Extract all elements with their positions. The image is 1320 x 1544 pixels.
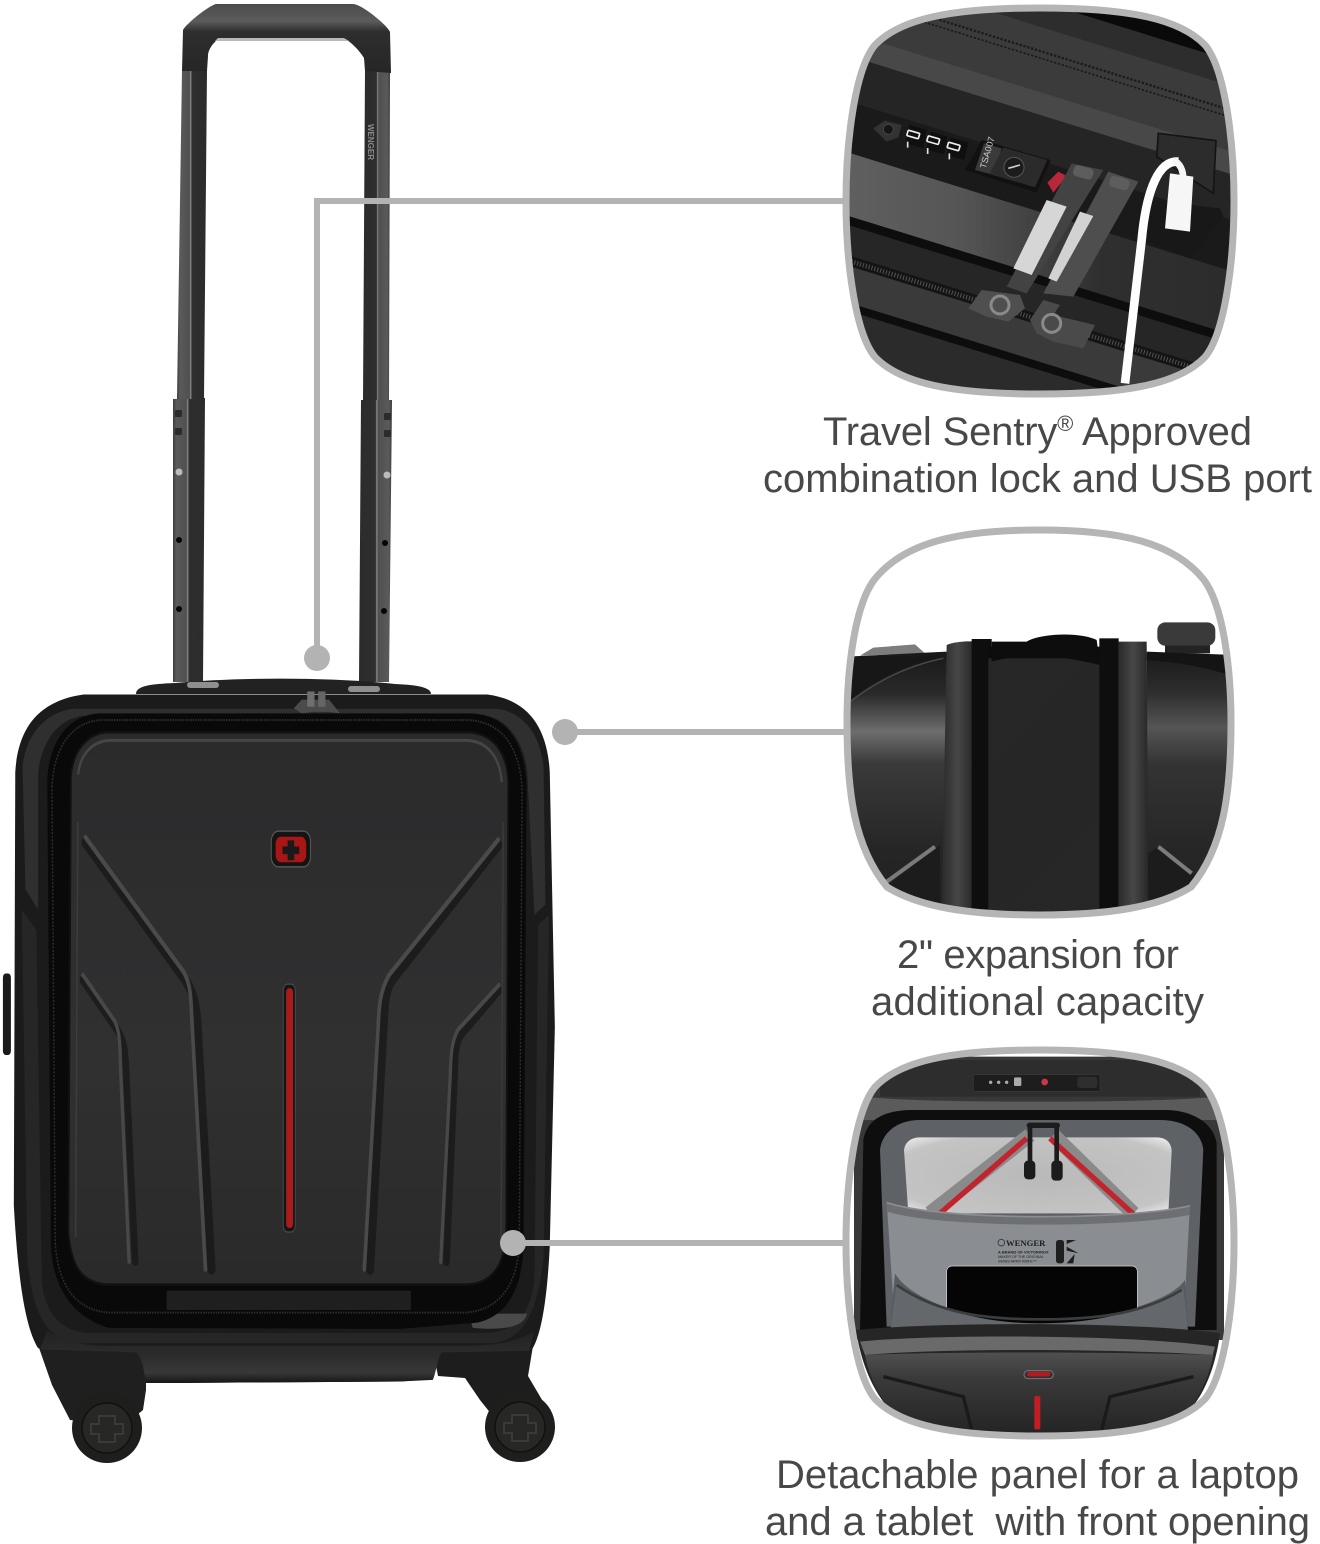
right shell bbox=[1146, 654, 1228, 878]
red stripe bbox=[283, 984, 295, 1232]
caption: expansion: additional capacity bbox=[871, 980, 1204, 1024]
grip bbox=[182, 4, 391, 73]
callout line: front panel bbox=[513, 1240, 845, 1246]
ridge lines bbox=[76, 823, 503, 1269]
callout line: expansion bbox=[565, 729, 845, 735]
bottom band bbox=[40, 1330, 534, 1383]
handle base plate bbox=[136, 679, 431, 694]
caption: lock and USB: combination lock and USB port bbox=[763, 457, 1312, 501]
silver fitting bbox=[860, 644, 925, 656]
callout line: lock bbox=[314, 198, 845, 658]
brand label: MAKER OF THE ORIGINAL bbox=[998, 1255, 1044, 1259]
side handle bbox=[3, 973, 11, 1055]
connector lines and dots bbox=[304, 198, 845, 1256]
knob bbox=[1157, 622, 1215, 653]
front zipper recess bbox=[47, 713, 526, 1329]
interior frame bbox=[860, 1110, 1217, 1330]
caption: expansion: 2" expansion for bbox=[897, 933, 1179, 977]
lock strip bbox=[973, 1075, 1100, 1091]
panel: expansion detail bbox=[840, 525, 1240, 925]
telescopic handle: WENGER bbox=[366, 124, 375, 160]
caption: expansion bbox=[871, 933, 1204, 1024]
zip pulls bbox=[1024, 1123, 1063, 1181]
callout dot: expansion bbox=[552, 719, 578, 745]
brand label: SWISS ARMY KNIFE™ bbox=[998, 1259, 1037, 1263]
front panel bbox=[68, 732, 508, 1285]
pull strap bbox=[167, 1291, 411, 1310]
tablet bbox=[947, 1266, 1137, 1326]
shell highlights bbox=[23, 709, 545, 915]
panel: front opening detail bbox=[840, 1040, 1240, 1450]
brand label bbox=[998, 1238, 1079, 1263]
caption: front panel bbox=[765, 1453, 1310, 1544]
upper poles bbox=[177, 70, 207, 399]
zipper pulls bbox=[968, 163, 1138, 348]
combination lock bbox=[873, 121, 968, 160]
open lid bbox=[856, 1324, 1220, 1405]
lid badge bbox=[1024, 1371, 1053, 1379]
expansion gusset bbox=[942, 635, 1148, 919]
lid red stripe bbox=[1034, 1396, 1040, 1429]
USB port plate bbox=[1157, 133, 1216, 193]
suitcase bbox=[3, 4, 555, 1463]
travel sentry diamond bbox=[1047, 172, 1067, 193]
key lock bbox=[965, 136, 1051, 193]
key lock: TSA007 bbox=[978, 136, 997, 170]
caption: lock and USB: Travel Sentry bbox=[823, 410, 1057, 454]
USB cable bbox=[1125, 160, 1193, 383]
red zip straps bbox=[930, 1135, 1133, 1214]
laptop bbox=[904, 1137, 1172, 1213]
left shell bbox=[847, 652, 947, 918]
brand label: WENGER bbox=[1006, 1238, 1046, 1248]
caption: lock and USB: Approved bbox=[1073, 410, 1252, 454]
panel: lock and USB detail bbox=[842, 4, 1238, 398]
zipper pull bbox=[294, 700, 340, 713]
wheels bbox=[38, 1340, 555, 1463]
hard-shell body bbox=[3, 691, 555, 1383]
caption: front panel: Detachable panel for a laptop bbox=[776, 1453, 1299, 1497]
logo badge bbox=[271, 831, 311, 867]
lower poles bbox=[173, 398, 205, 682]
caption: front panel: and a tablet with front opening bbox=[765, 1500, 1310, 1544]
callout dot: front panel bbox=[500, 1230, 526, 1256]
caption: lock and USB: ® bbox=[1057, 411, 1073, 436]
brand label: A BRAND OF VICTORINOX bbox=[998, 1249, 1049, 1254]
telescopic handle bbox=[173, 4, 392, 682]
tablet pocket bbox=[890, 1273, 1188, 1327]
mesh pocket bbox=[886, 1202, 1190, 1307]
caption: lock and USB bbox=[763, 410, 1312, 501]
callout dot: lock bbox=[304, 645, 330, 671]
